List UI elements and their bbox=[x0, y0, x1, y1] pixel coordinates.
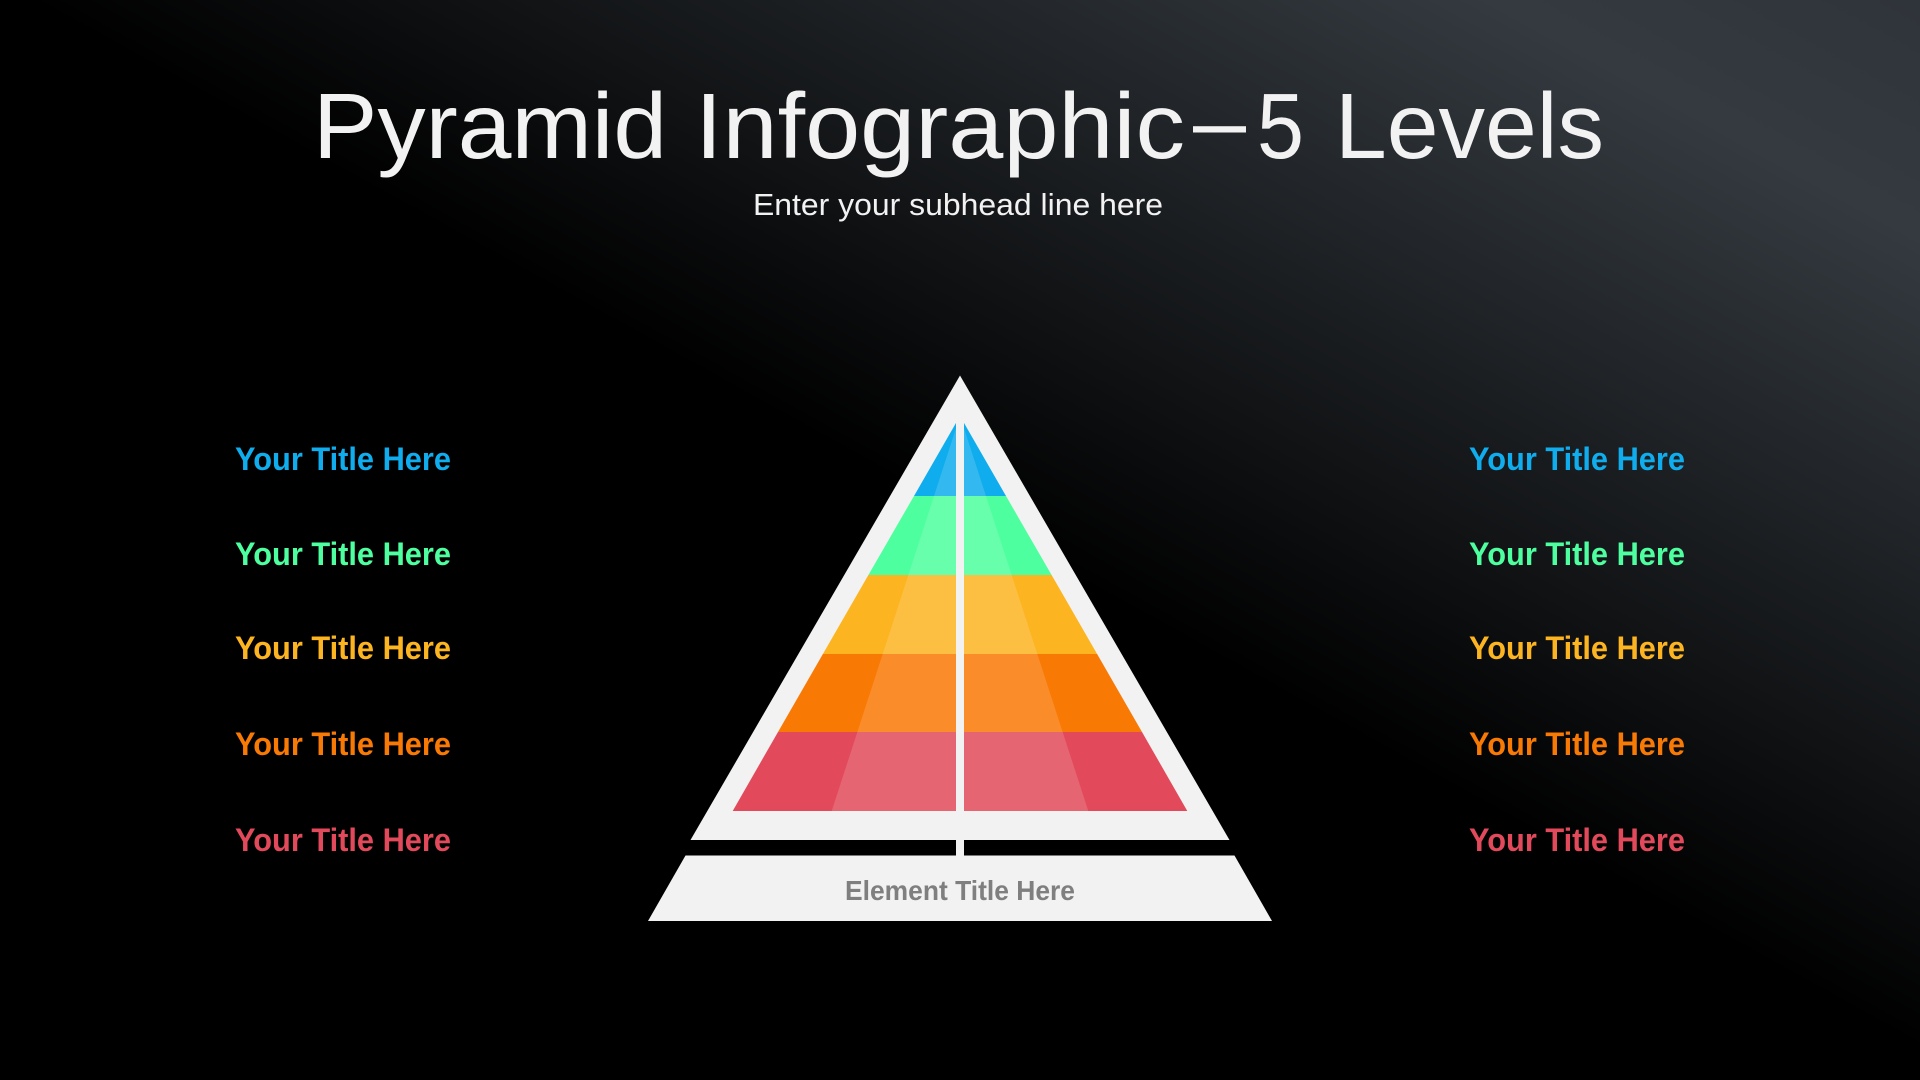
left label: level 4: Your Title Here bbox=[235, 726, 451, 762]
left labels column bbox=[235, 441, 451, 858]
title: — bbox=[1193, 69, 1246, 173]
base plate bbox=[648, 856, 1272, 921]
centre vertical bar bbox=[956, 416, 964, 856]
title: Levels bbox=[1335, 74, 1604, 178]
right label: level 1: Your Title Here bbox=[1469, 441, 1685, 477]
right label: level 5: Your Title Here bbox=[1469, 822, 1685, 858]
right label: level 3: Your Title Here bbox=[1469, 630, 1685, 666]
right label: level 4: Your Title Here bbox=[1469, 726, 1685, 762]
title: Infographic bbox=[695, 74, 1185, 178]
base plate label: Element Title Here bbox=[845, 875, 1075, 906]
left label: level 5: Your Title Here bbox=[235, 822, 451, 858]
right labels column bbox=[1469, 441, 1685, 858]
right label: level 2: Your Title Here bbox=[1469, 536, 1685, 572]
level 4 band: orange bbox=[778, 654, 1142, 732]
title: Pyramid bbox=[313, 74, 667, 178]
title: 5 bbox=[1257, 74, 1304, 178]
level 3 band: yellow bbox=[823, 575, 1097, 654]
subtitle: Enter your subhead line here bbox=[753, 187, 1163, 222]
left label: level 2: Your Title Here bbox=[235, 536, 451, 572]
pyramid diagram bbox=[648, 376, 1272, 921]
outer pyramid frame bbox=[690, 376, 1230, 840]
left label: level 3: Your Title Here bbox=[235, 630, 451, 666]
left label: level 1: Your Title Here bbox=[235, 441, 451, 477]
level 1 band: blue bbox=[914, 416, 1006, 496]
level 2 band: green bbox=[868, 496, 1052, 575]
level 5 band: red bbox=[733, 732, 1187, 811]
centre light facet bbox=[832, 416, 1088, 811]
